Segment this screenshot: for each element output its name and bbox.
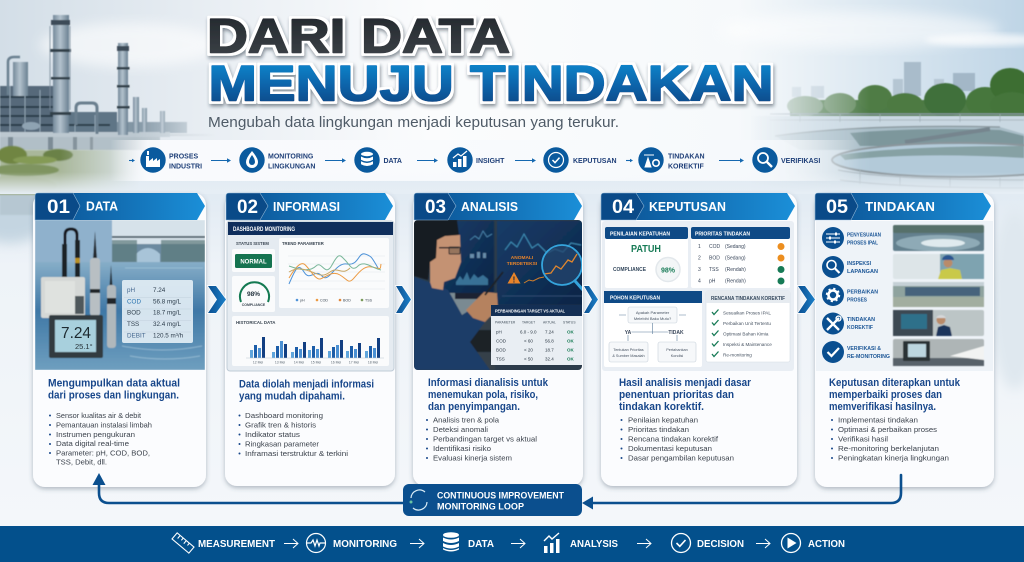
- meter: [49, 315, 103, 358]
- text: card 1: Instrumen pengukuran: [56, 430, 135, 439]
- title line 1: DARI DATA: [207, 10, 510, 64]
- trend chart: COD: [320, 298, 328, 302]
- comparison table: pH: [496, 330, 502, 334]
- decision dashboard: [602, 221, 794, 371]
- dashboard: DASHBOARD MONITORING: [233, 227, 295, 233]
- text: card 4: Penilaian kepatuhan: [628, 416, 698, 424]
- text: card 2: Inframasi terstruktur & terkini: [245, 449, 348, 458]
- header: 05 tindakan: 05: [826, 197, 848, 218]
- action: inspeksi lapangan: LAPANGAN: [847, 269, 878, 275]
- action: perbaikan proses: PERBAIKAN: [847, 290, 878, 296]
- historical bars: 16 Mei: [331, 360, 341, 364]
- step: monitoring lingkungan: [239, 147, 315, 173]
- skyline: [792, 62, 975, 98]
- priorities panel: PRIORITAS TINDAKAN: [695, 232, 750, 238]
- comparison table: 32.4: [545, 356, 554, 362]
- analyst: [414, 277, 490, 370]
- text: card 5: [829, 377, 960, 462]
- step: proses industri: INDUSTRI: [169, 164, 202, 170]
- corrective plan panel: Inspeksi & Maintenance: [723, 342, 772, 347]
- priorities panel: 1: [698, 244, 701, 250]
- decision tree panel: Pertahankan: [666, 348, 688, 352]
- continuous improvement loop: CONTINUOUS IMPROVEMENT: [437, 490, 565, 500]
- icon: data: [443, 532, 459, 552]
- priorities panel: COD: [709, 244, 720, 250]
- monitors: [443, 221, 494, 293]
- trend chart: TREND PARAMETER: [282, 241, 324, 246]
- corrective plan panel: Perbaikan Unit Tertentu: [723, 321, 771, 326]
- text: card 5: Optimasi & perbaikan proses: [838, 425, 937, 434]
- comparison table: [491, 305, 582, 365]
- step: data: DATA: [384, 158, 402, 165]
- action: verifikasi dan re-monitoring: VERIFIKASI &: [847, 346, 881, 352]
- historical bars: 15 Mei: [311, 360, 321, 364]
- historical bars: HISTORICAL DATA: [236, 320, 276, 325]
- header: 02 informasi: 02: [237, 197, 258, 218]
- text: card 5: Re-monitoring berkelanjutan: [838, 444, 939, 453]
- historical bars: 14 Mei: [294, 360, 304, 364]
- text: card 3: dan penyimpangan.: [428, 401, 520, 413]
- refinery stacks: [8, 15, 165, 135]
- header: 03 analisis: ANALISIS: [461, 200, 518, 214]
- step: data: [354, 147, 402, 173]
- bottom band: DECISION: [697, 539, 744, 550]
- sensor cable: [63, 227, 79, 245]
- bottom band: [0, 526, 1024, 562]
- gauge panel: COMPLIANCE: [242, 303, 266, 307]
- step: tindakan korektif: TINDAKAN: [668, 154, 705, 160]
- priorities panel: pH: [709, 278, 716, 284]
- step: proses industri: PROSES: [169, 154, 199, 160]
- decision tree panel: YA: [625, 330, 632, 336]
- step: tindakan korektif: KOREKTIF: [668, 164, 704, 170]
- text: card 4: Dokumentasi keputusan: [628, 444, 712, 453]
- comparison table: COD: [496, 338, 507, 344]
- icon: analysis: [544, 533, 560, 553]
- desk: [449, 292, 491, 318]
- data table: BOD: [127, 310, 141, 316]
- text: card 2: yang mudah dipahami.: [239, 390, 345, 402]
- header: 05 tindakan: [815, 193, 991, 220]
- header: 02 informasi: INFORMASI: [273, 200, 340, 214]
- card 5: tindakan: [815, 193, 994, 487]
- historical bars: 13 Mei: [275, 360, 285, 364]
- step: keputusan: [543, 147, 617, 173]
- data table: 32.4 mg/L: [153, 321, 182, 328]
- text: card 3: Informasi dianalisis untuk: [428, 377, 548, 389]
- step: verifikasi: [752, 147, 820, 173]
- trend chart: TSS: [365, 298, 373, 302]
- step: proses industri: [140, 147, 202, 173]
- photo: sensors: 7.24: [61, 325, 91, 342]
- text: card 1: TSS, Debit, dll.: [56, 458, 107, 466]
- step: monitoring lingkungan: LINGKUNGAN: [268, 164, 315, 170]
- text: card 1: Data digital real-time: [56, 439, 129, 448]
- text: card 4: Dasar pengambilan keputusan: [628, 454, 734, 462]
- priorities panel: 4: [698, 278, 701, 284]
- text: card 2: Grafik tren & historis: [245, 420, 316, 430]
- bottom band: DATA: [468, 539, 494, 550]
- header: 03 analisis: [414, 193, 582, 220]
- comparison table: OK: [567, 348, 575, 352]
- comparison table: TSS: [496, 356, 505, 362]
- text: card 2: Ringkasan parameter: [245, 440, 320, 448]
- title: [207, 10, 774, 112]
- card 4: keputusan: [601, 193, 797, 486]
- comparison table: PARAMETER: [495, 320, 516, 324]
- header: 04 keputusan: KEPUTUSAN: [649, 200, 726, 214]
- arrows between cards: [208, 286, 815, 313]
- text: card 4: Hasil analisis menjadi dasar: [619, 377, 751, 389]
- text: card 3: [426, 377, 548, 462]
- text: card 5: memverifikasi hasilnya.: [829, 401, 936, 413]
- anomaly alert: TERDETEKSI: [507, 261, 538, 267]
- header: 05 tindakan: TINDAKAN: [865, 200, 935, 214]
- corrective plan panel: RENCANA TINDAKAN KOREKTIF: [711, 296, 785, 302]
- action: verifikasi dan re-monitoring: [822, 339, 984, 366]
- feedback loop connector: [92, 473, 901, 510]
- action: inspeksi lapangan: [822, 254, 984, 279]
- comparison table: 18.7: [545, 348, 554, 352]
- data table: 18.7 mg/L: [153, 310, 182, 316]
- step: verifikasi: VERIFIKASI: [781, 158, 820, 165]
- dashboard: [227, 221, 394, 371]
- text: card 3: Evaluasi kinerja sistem: [433, 454, 512, 462]
- decision tree panel: Kondisi: [671, 354, 683, 358]
- priorities panel: 2: [698, 256, 701, 262]
- text: card 5: Verifikasi hasil: [838, 434, 888, 444]
- icon: monitoring: [306, 534, 326, 552]
- data table: 120.5 m³/h: [153, 332, 184, 340]
- data table: TSS: [127, 321, 139, 328]
- text: card 4: Rencana tindakan korektif: [628, 434, 718, 444]
- step: insight: [447, 147, 505, 173]
- action: perbaikan proses: PROSES: [847, 298, 867, 304]
- gauge panel: [232, 276, 275, 312]
- text: card 5: memperbaiki proses dan: [829, 389, 942, 401]
- priorities panel: TSS: [709, 267, 719, 273]
- text: card 3: Perbandingan target vs aktual: [433, 434, 537, 444]
- text: card 1: Parameter: pH, COD, BOD,: [56, 448, 150, 458]
- comparison table: OK: [567, 330, 575, 334]
- text: card 1: Pemantauan instalasi limbah: [56, 420, 152, 430]
- text: card 4: penentuan prioritas dan: [619, 389, 734, 401]
- photo: treatment plant: [770, 62, 1024, 189]
- title line 2: MENUJU TINDAKAN: [208, 56, 774, 112]
- priorities panel: [691, 227, 790, 288]
- text: card 3: menemukan pola, risiko,: [428, 389, 538, 401]
- action: penyesuaian proses: [822, 225, 984, 251]
- photo: refinery: [0, 15, 215, 150]
- junction box: [41, 277, 85, 318]
- step: monitoring lingkungan: MONITORING: [268, 154, 314, 160]
- fade: ground: [0, 172, 1024, 194]
- icon: measurement: [172, 533, 194, 553]
- comparison table: < 20: [524, 348, 533, 352]
- action: perbaikan proses: [822, 282, 984, 307]
- historical bars: [232, 316, 389, 366]
- comparison table: AKTUAL: [543, 320, 556, 324]
- data table: COD: [127, 298, 141, 306]
- action: tindakan korektif: TINDAKAN: [847, 317, 875, 323]
- text: card 1: Mengumpulkan data aktual: [48, 378, 180, 390]
- anomaly alert: !: [513, 276, 515, 284]
- step: insight: INSIGHT: [476, 158, 505, 165]
- card 2: informasi: [225, 193, 395, 486]
- text: card 3: Analisis tren & pola: [433, 416, 499, 424]
- comparison table: BOD: [496, 348, 507, 352]
- step: keputusan: KEPUTUSAN: [573, 158, 617, 165]
- flow arrows: [129, 158, 744, 163]
- text: card 2: [238, 378, 374, 458]
- status panel: [232, 241, 275, 272]
- text: card 5: Peningkatan kinerja lingkungan: [838, 454, 949, 462]
- anomaly alert: ANOMALI: [511, 255, 534, 261]
- data table: pH: [127, 287, 136, 294]
- icon: loop: [410, 490, 427, 510]
- text: card 3: Deteksi anomali: [433, 425, 488, 434]
- text: card 1: [48, 378, 180, 466]
- comparison table: OK: [567, 338, 575, 344]
- decision tree panel: [604, 291, 702, 367]
- trees: [787, 68, 1024, 118]
- header: 01 data: [35, 193, 205, 220]
- comparison table: TARGET: [522, 320, 535, 324]
- text: card 2: Data diolah menjadi informasi: [239, 378, 374, 390]
- bottom band: MEASUREMENT: [198, 539, 275, 550]
- text: card 2: Indikator status: [245, 430, 300, 439]
- action: tindakan korektif: KOREKTIF: [847, 325, 873, 331]
- decision tree panel: POHON KEPUTUSAN: [610, 296, 660, 302]
- continuous improvement loop: [403, 484, 582, 516]
- header: 01 data: DATA: [86, 200, 118, 214]
- gauge panel: 98%: [247, 291, 260, 298]
- historical bars: 17 Mei: [349, 360, 359, 364]
- compliance panel: 98%: [661, 268, 676, 274]
- trend chart: pH: [300, 298, 305, 302]
- magnifier: [542, 245, 583, 290]
- bottom band: MONITORING: [333, 539, 397, 550]
- text: card 5: Implementasi tindakan: [838, 416, 918, 424]
- comparison table: < 60: [524, 338, 533, 344]
- comparison table: 7.24: [545, 330, 554, 334]
- header: 01 data: 01: [47, 197, 70, 218]
- text: card 3: Identifikasi risiko: [433, 444, 491, 453]
- text: card 4: [619, 377, 751, 462]
- process flow strip: [110, 140, 860, 181]
- data table: DEBIT: [127, 332, 146, 340]
- subtitle: Mengubah data lingkungan menjadi keputusan yang terukur.: [208, 114, 619, 131]
- corrective plan panel: Re-monitoring: [723, 352, 752, 358]
- icon: action: [782, 534, 800, 552]
- compliance panel: COMPLIANCE: [613, 267, 647, 273]
- priorities panel: (Sedang): [725, 244, 746, 250]
- bottom band: ACTION: [808, 539, 845, 550]
- step: tindakan korektif: [638, 147, 705, 173]
- priorities panel: (Sedang): [725, 256, 746, 262]
- action: penyesuaian proses: PROSES IPAL: [847, 240, 878, 246]
- text: card 4: tindakan korektif.: [619, 401, 704, 413]
- photo: analyst: [414, 220, 583, 370]
- action: verifikasi dan re-monitoring: RE-MONITORING: [847, 354, 890, 360]
- corrective plan panel: Sesuaikan Proses IPAL: [723, 310, 771, 316]
- decision tree panel: TIDAK: [668, 330, 684, 336]
- data table: 56.8 mg/L: [153, 298, 182, 306]
- historical bars: 18 Mei: [368, 360, 378, 364]
- decision tree panel: & Sumber Masalah: [612, 354, 645, 358]
- refinery deck: [0, 86, 215, 150]
- historical bars: 12 Mei: [253, 360, 263, 364]
- anomaly alert: [507, 255, 544, 284]
- header: 04 keputusan: 04: [612, 197, 634, 218]
- comparison table: STATUS: [563, 320, 576, 324]
- bottom band: ANALYSIS: [570, 539, 618, 550]
- priorities panel: (Rendah): [725, 278, 746, 284]
- header: 02 informasi: [226, 193, 393, 220]
- probes: [93, 231, 97, 259]
- card 1: data: [33, 193, 206, 487]
- text: card 4: Prioritas tindakan: [628, 425, 689, 434]
- action: inspeksi lapangan: INSPEKSI: [847, 261, 871, 267]
- action: tindakan korektif: [822, 310, 984, 336]
- header: 03 analisis: 03: [425, 197, 446, 218]
- priorities panel: BOD: [709, 256, 720, 262]
- icon: decision: [672, 534, 690, 552]
- action: penyesuaian proses: PENYESUAIAN: [847, 232, 881, 238]
- data table: 7.24: [153, 287, 166, 294]
- comparison table: PERBANDINGAN TARGET VS AKTUAL: [495, 308, 565, 314]
- text: card 2: Dashboard monitoring: [245, 411, 323, 420]
- text: card 1: dari proses dan lingkungan.: [48, 390, 179, 402]
- decision tree panel: Melebihi Baku Mutu?: [634, 316, 672, 321]
- decision tree panel: Tentukan Prioritas: [613, 348, 644, 352]
- priorities panel: 3: [698, 267, 701, 273]
- tanks and water: [770, 112, 1024, 189]
- comparison table: 6.0 - 9.0: [520, 330, 537, 334]
- text: card 5: Keputusan diterapkan untuk: [829, 377, 960, 389]
- comparison table: OK: [567, 356, 575, 362]
- vegetation: [0, 145, 127, 215]
- card 3: analisis: [413, 193, 583, 486]
- photo: sensors: [35, 220, 205, 370]
- data table: [122, 280, 193, 343]
- decision tree panel: Apakah Parameter: [636, 310, 670, 315]
- corrective plan panel: Optimasi Bahan Kimia: [723, 332, 769, 336]
- comparison table: 56.8: [545, 338, 554, 344]
- status panel: NORMAL: [240, 260, 267, 266]
- corrective plan panel: [706, 291, 790, 362]
- compliance panel: PATUH: [631, 244, 661, 255]
- status panel: STATUS SISTEM: [236, 241, 269, 246]
- trend chart: [279, 238, 389, 308]
- compliance panel: PENILAIAN KEPATUHAN: [610, 232, 670, 238]
- compliance panel: [605, 227, 688, 288]
- priorities panel: (Rendah): [725, 267, 746, 273]
- comparison table: < 50: [524, 356, 533, 362]
- photo: sensors: 25.1°: [75, 342, 93, 351]
- trend chart: BOD: [343, 298, 351, 302]
- band arrows: [284, 539, 770, 548]
- text: card 1: Sensor kualitas air & debit: [56, 411, 141, 420]
- continuous improvement loop: MONITORING LOOP: [437, 502, 524, 512]
- header: 04 keputusan: [601, 193, 795, 220]
